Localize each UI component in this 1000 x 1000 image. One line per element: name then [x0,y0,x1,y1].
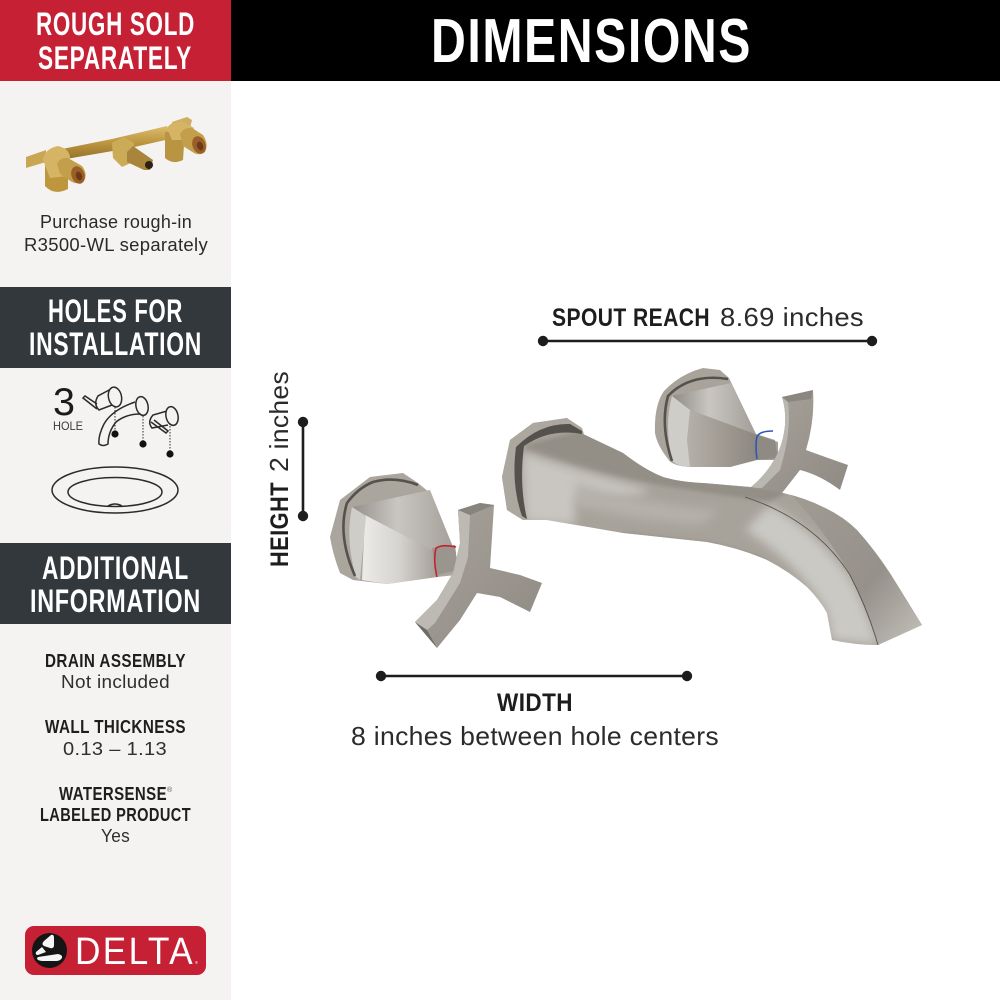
title banner: DIMENSIONS: DIMENSIONS [431,7,752,76]
text: drain assembly: Not included [61,672,170,692]
text: drain assembly [45,651,186,692]
heading: additional information: ADDITIONAL [42,550,189,586]
heading: holes for installation: INSTALLATION [29,326,202,362]
sidebar panel [0,0,231,1000]
icon: 3 hole faucet and sink [52,381,180,513]
logo: Delta: ® [195,960,198,965]
text: drain assembly: DRAIN ASSEMBLY [45,651,186,671]
text: watersense: ® [167,786,173,794]
text: wall thickness [45,717,186,759]
heading: rough sold separately: SEPARATELY [38,40,192,76]
icon: 3 hole faucet and sink: 3 [53,381,75,424]
faucet: spout [502,418,922,645]
text: purchase rough-in [24,212,208,255]
text: wall thickness: 0.13 – 1.13 [63,739,167,759]
heading: additional information: INFORMATION [30,583,201,619]
title banner: DIMENSIONS [231,0,1000,81]
icon: brass rough-in valve [26,117,208,192]
dimension: spout reach: 8.69 inches [720,302,864,332]
dimension: height: HEIGHT [266,482,294,567]
faucet: left (hot) handle [330,473,542,648]
dimension: width [351,671,719,751]
dimension: spout reach: SPOUT REACH [552,304,710,332]
text: watersense: Yes [101,826,130,846]
text: watersense [40,784,191,846]
logo: Delta: DELTA [75,931,195,973]
dimension: spout reach [538,302,877,346]
heading: holes for installation: HOLES FOR [48,293,183,329]
icon: 3 hole faucet and sink: HOLE [53,419,83,433]
heading: holes for installation [0,287,231,368]
text: wall thickness: WALL THICKNESS [45,717,186,737]
dimension: height: 2 inches [264,371,294,472]
text: watersense: WATERSENSE [59,784,167,804]
dimension: width: 8 inches between hole centers [351,721,719,751]
text: purchase rough-in: Purchase rough-in [40,212,192,232]
heading: rough sold separately: ROUGH SOLD [36,6,195,42]
dimension: height [264,371,308,567]
dimension: width: WIDTH [497,689,573,717]
text: watersense: LABELED PRODUCT [40,805,191,825]
heading: additional information [0,543,231,624]
text: purchase rough-in: R3500-WL separately [24,235,208,255]
faucet: right (cold) handle [655,368,848,493]
heading: rough sold separately [0,0,231,81]
logo: Delta [25,926,206,975]
